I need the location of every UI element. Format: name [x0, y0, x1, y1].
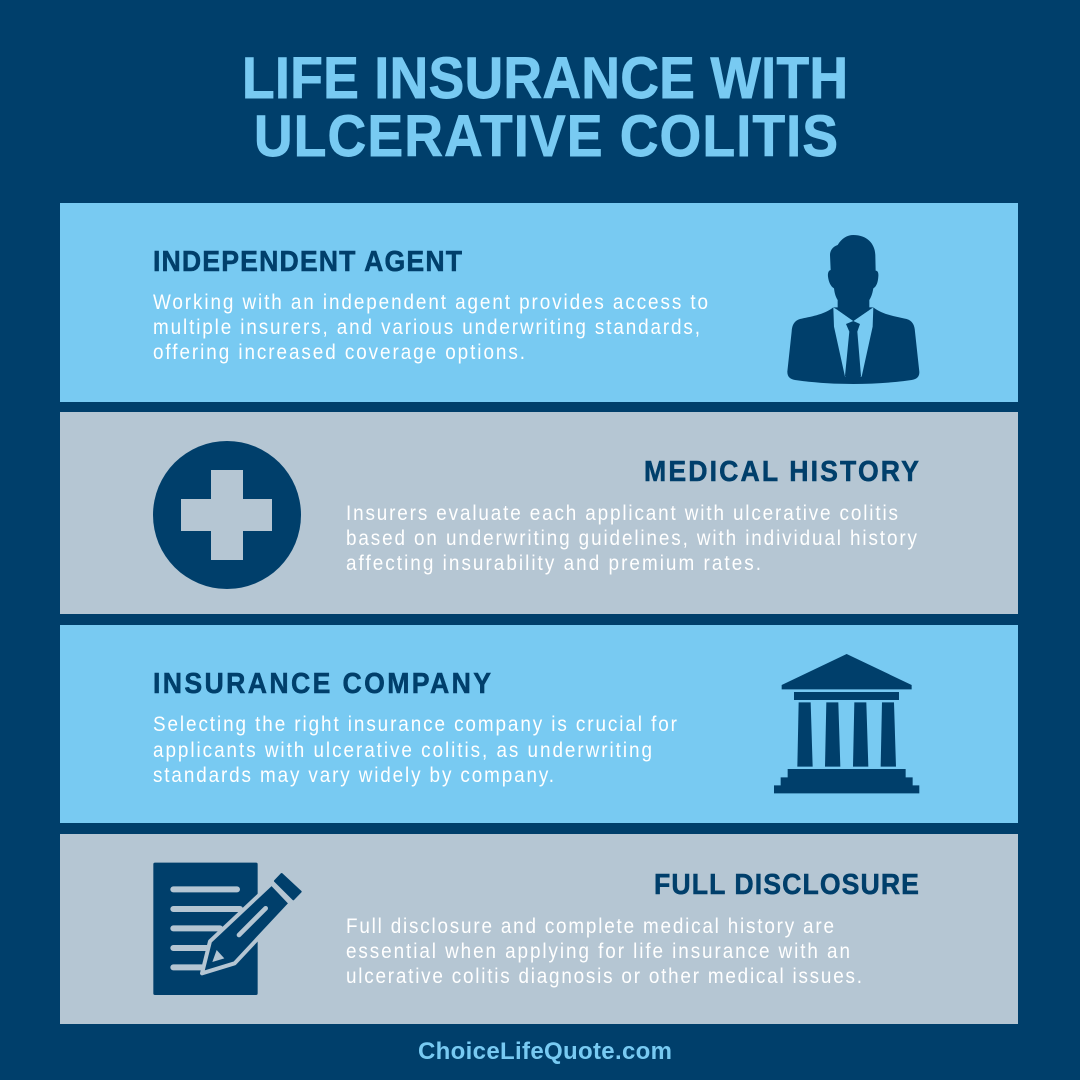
panel: insurance company [60, 625, 1018, 823]
icon: medical cross [153, 441, 301, 589]
text block: independent agent: multiple insurers, and various underwriting standards, [153, 316, 700, 339]
title: ULCERATIVE COLITIS [254, 104, 838, 168]
text block: independent agent [153, 291, 708, 364]
text block: independent agent: offering increased coverage options. [153, 341, 525, 364]
text block: insurance company: standards may vary widely by company. [153, 764, 554, 787]
text block: independent agent: Working with an independent agent provides access to [153, 291, 708, 314]
heading: full disclosure: FULL DISCLOSURE [654, 868, 919, 900]
text block: insurance company: applicants with ulcerative colitis, as underwriting [153, 739, 652, 762]
text block: medical history [346, 502, 917, 575]
heading: independent agent: INDEPENDENT AGENT [153, 245, 462, 277]
text block: medical history: Insurers evaluate each applicant with ulcerative colitis [346, 502, 898, 525]
panel: medical history [60, 412, 1018, 614]
panel: independent agent [60, 203, 1018, 402]
text block: medical history: based on underwriting guidelines, with individual history [346, 527, 917, 550]
text block: insurance company [153, 713, 677, 787]
title [242, 46, 848, 168]
icon: businessman [787, 235, 919, 384]
text block: full disclosure: essential when applying for life insurance with an [346, 940, 850, 963]
icon: institution building [774, 654, 919, 793]
heading: insurance company: INSURANCE COMPANY [153, 667, 491, 699]
text block: insurance company: Selecting the right insurance company is crucial for [153, 713, 677, 736]
heading: medical history: MEDICAL HISTORY [644, 455, 919, 487]
icon: document and pencil [153, 863, 301, 995]
title: LIFE INSURANCE WITH [242, 46, 848, 110]
footer: website: ChoiceLifeQuote.com [418, 1038, 672, 1065]
text block: full disclosure: ulcerative colitis diagnosis or other medical issues. [346, 965, 862, 988]
text block: full disclosure [346, 915, 862, 988]
panel: full disclosure [60, 834, 1018, 1024]
text block: medical history: affecting insurability and premium rates. [346, 552, 761, 575]
text block: full disclosure: Full disclosure and complete medical history are [346, 915, 834, 938]
